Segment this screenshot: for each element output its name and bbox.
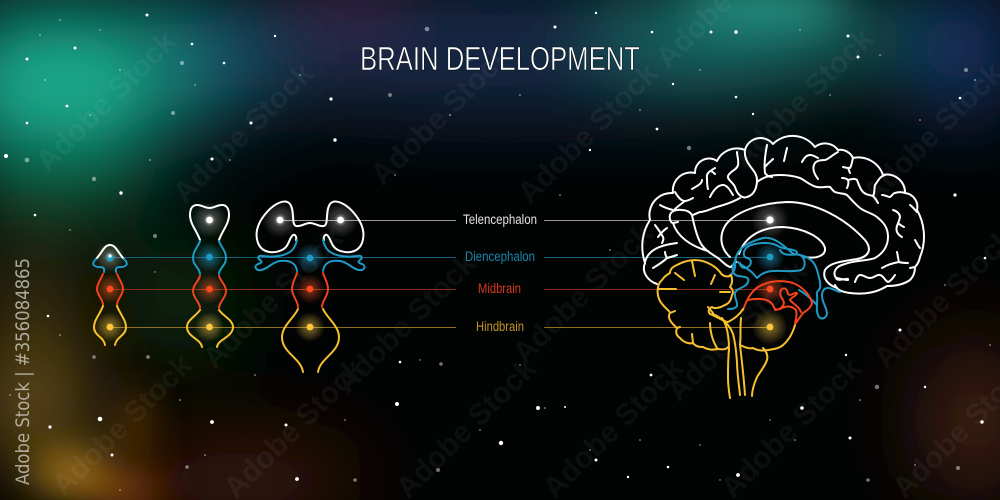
watermark: Adobe Stock: Adobe Stock: [365, 39, 518, 192]
title: BRAIN DEVELOPMENT: [360, 40, 640, 77]
watermark: Adobe Stock: Adobe Stock: [197, 222, 350, 375]
watermark: Adobe Stock: Adobe Stock: [661, 255, 814, 408]
watermark: Adobe Stock: Adobe Stock: [727, 22, 880, 175]
watermark: Adobe Stock: Adobe Stock: [507, 217, 660, 370]
diencephalon: [728, 238, 840, 318]
watermark: Adobe Stock: Adobe Stock: [46, 349, 199, 500]
labels: Diencephalon: [465, 249, 535, 264]
watermark: Adobe Stock: Adobe Stock: [167, 57, 320, 210]
labels: Telencephalon: [463, 212, 537, 227]
watermark: Adobe Stock: Adobe Stock: [512, 57, 665, 210]
labels: Midbrain: [478, 281, 521, 296]
neural tube stage 2: [187, 202, 233, 347]
leader lines: [110, 220, 770, 328]
hindbrain: [658, 260, 795, 398]
cerebrum: [642, 136, 924, 294]
adult brain: [642, 136, 924, 398]
neural tube stage 1: [93, 242, 127, 345]
labels: Hindbrain: [476, 319, 524, 334]
midbrain: [743, 281, 812, 323]
center dots: [766, 216, 774, 330]
watermark: stock number: Adobe Stock | #356084865: [12, 258, 34, 485]
labels: [463, 212, 537, 334]
glow points: [751, 201, 789, 345]
neural tube stage 3: [255, 202, 365, 372]
watermark: Adobe Stock: Adobe Stock: [330, 247, 483, 400]
watermark: Adobe Stock: Adobe Stock: [30, 25, 183, 178]
